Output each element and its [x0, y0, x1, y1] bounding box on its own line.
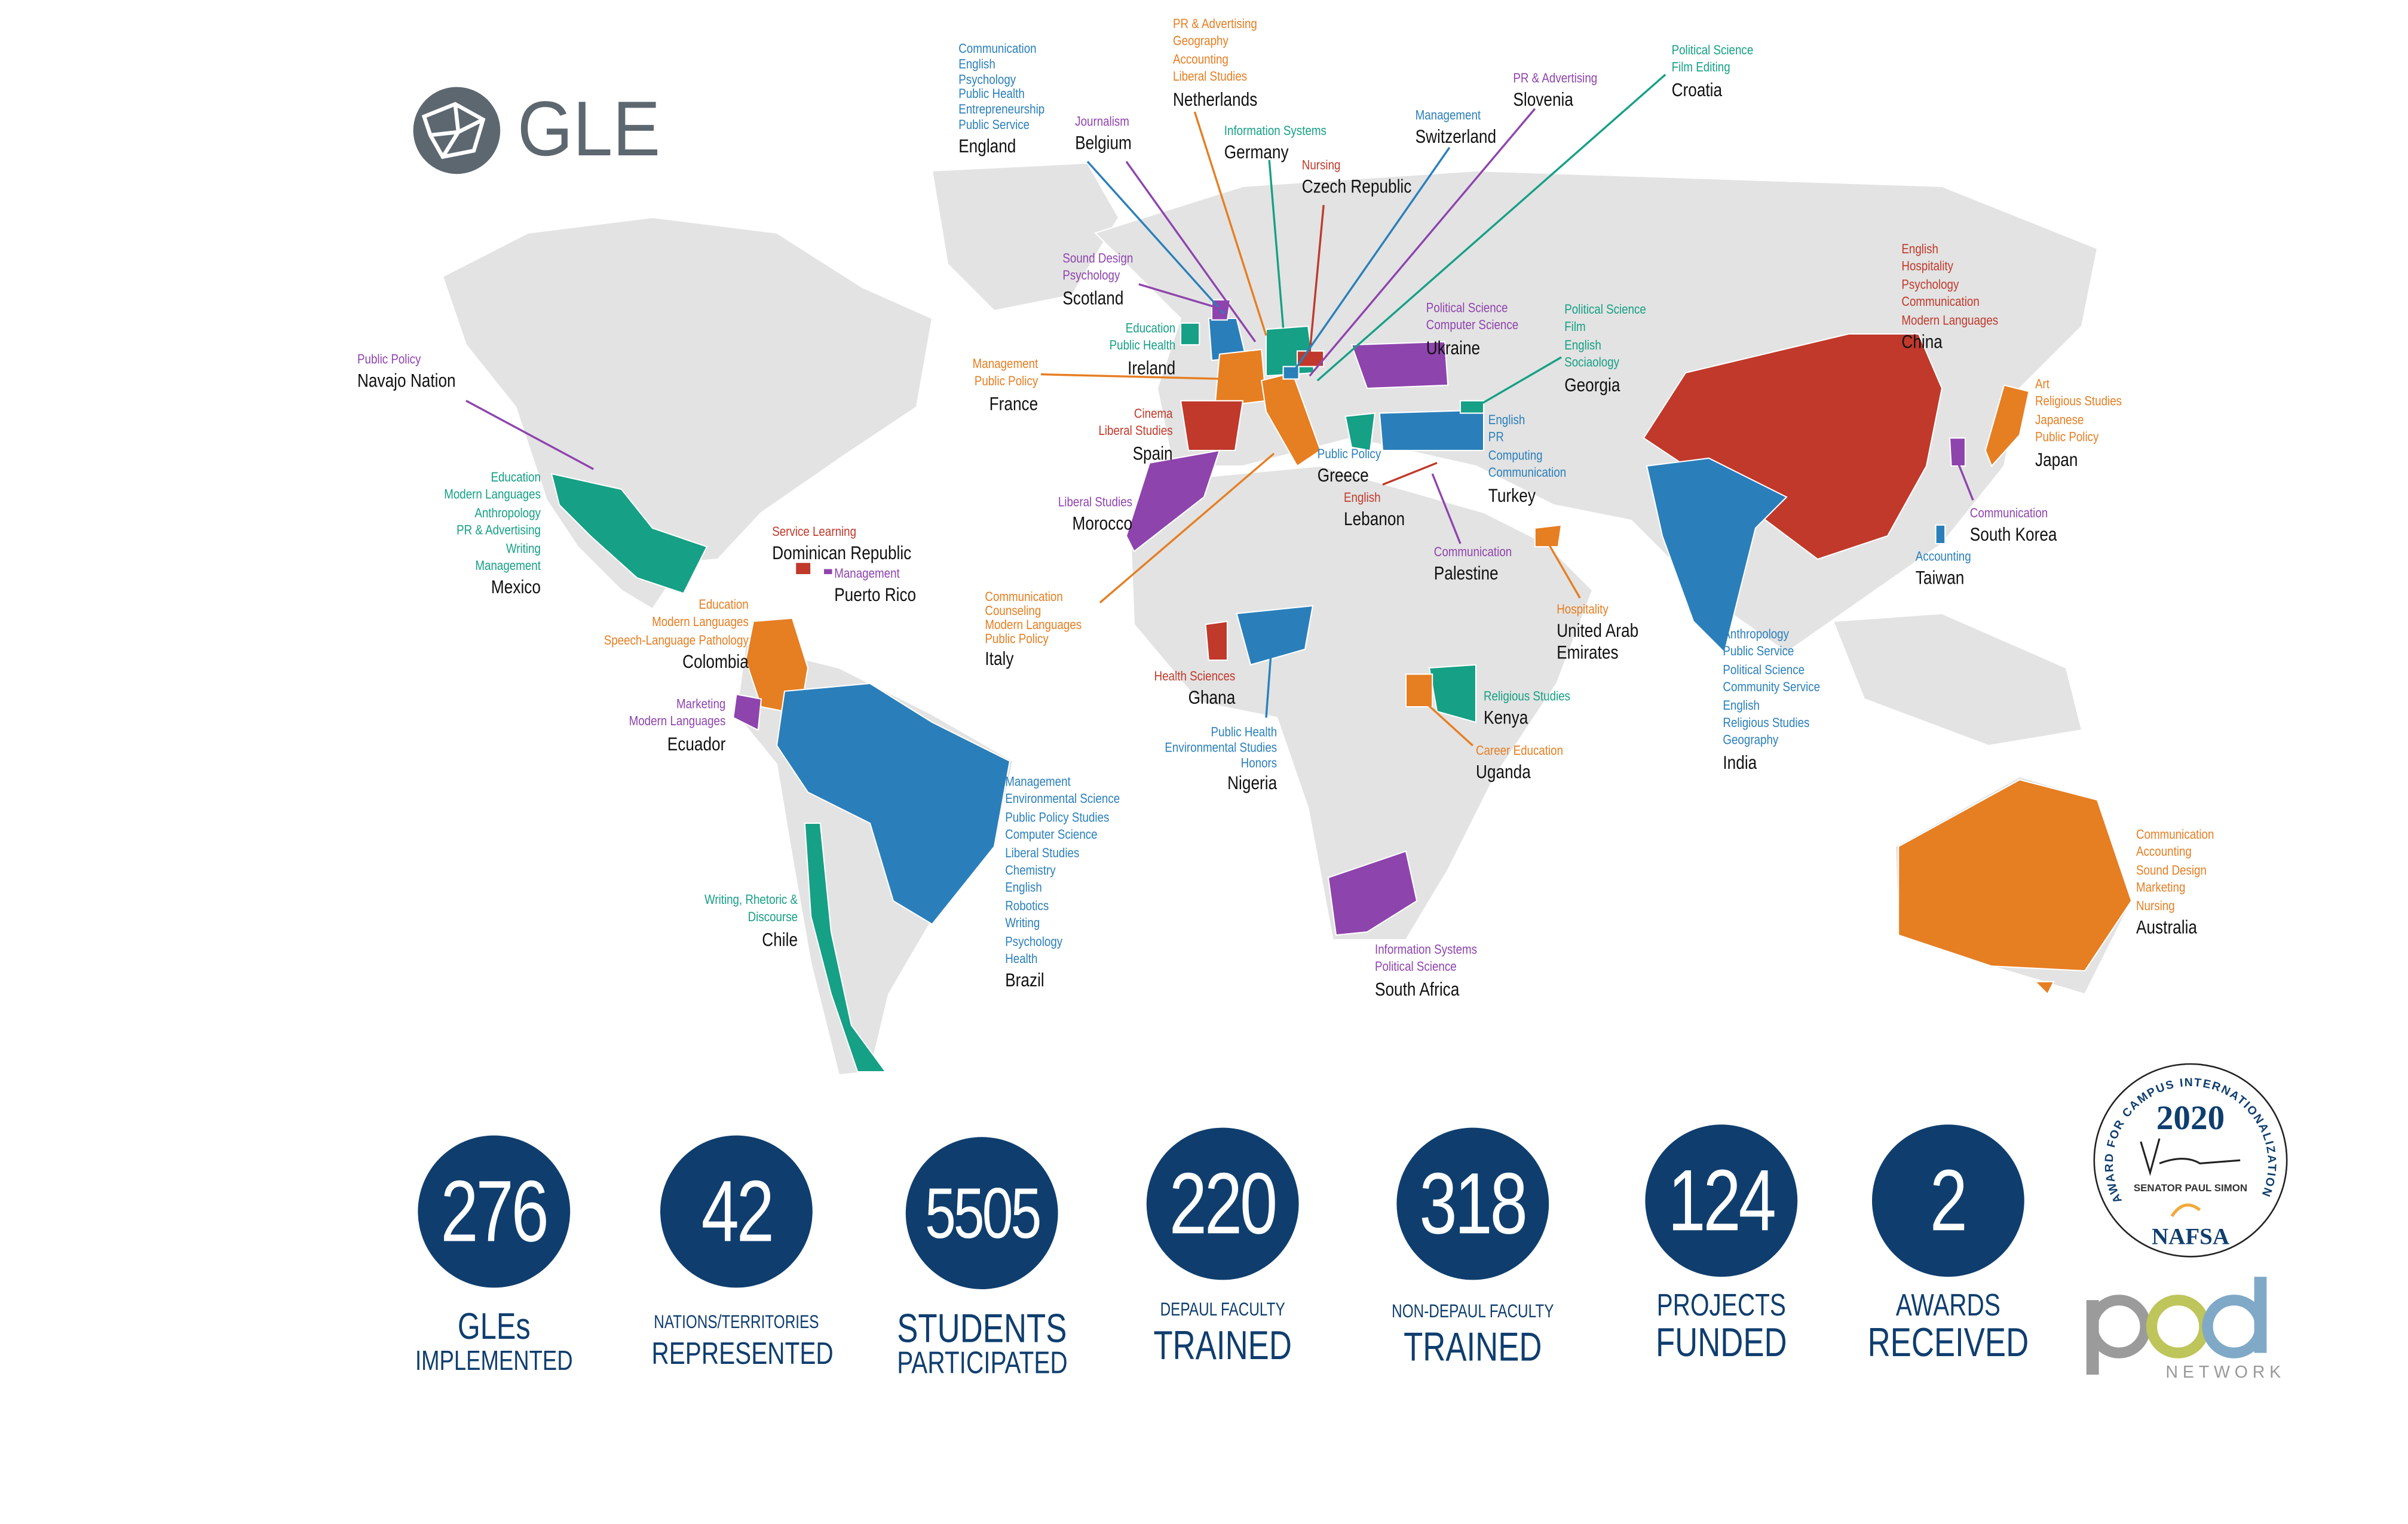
text: Marketing	[676, 696, 725, 712]
text: Information Systems	[1375, 942, 1477, 957]
text: Lebanon	[1344, 508, 1405, 531]
text: Dominican Republic	[772, 542, 911, 565]
stat: depaul faculty: 220	[1170, 1154, 1276, 1252]
text: Australia	[2136, 916, 2197, 938]
labels: Americas: Public Policy	[357, 351, 421, 367]
text: Environmental Science	[1005, 791, 1120, 807]
text: Scotland	[1062, 287, 1123, 309]
stat: nations: REPRESENTED	[651, 1338, 834, 1372]
stat: GLEs: GLEs	[458, 1307, 531, 1348]
text: Modern Languages	[985, 617, 1082, 632]
text: Management	[475, 557, 541, 573]
labels: Europe: Psychology	[958, 71, 1016, 87]
badge: NAFSA award: AWARD FOR CAMPUS INTERNATIONALIZATION	[2104, 1078, 2277, 1201]
stat: non-depaul faculty: TRAINED	[1404, 1323, 1542, 1370]
badge: NAFSA award: 2020	[2156, 1099, 2225, 1137]
text: English	[1723, 697, 1760, 712]
text: Turkey	[1488, 484, 1536, 506]
labels: Asia / Oceania: English	[1901, 241, 1938, 256]
text: Mexico	[491, 577, 541, 599]
stat: GLEs: IMPLEMENTED	[415, 1345, 573, 1376]
stat: nations	[651, 1135, 834, 1372]
text: Art	[2035, 376, 2049, 391]
text: Ireland	[1128, 357, 1176, 379]
text: Liberal Studies	[1005, 844, 1079, 860]
text: Nigeria	[1227, 772, 1277, 795]
text: Political Science	[1426, 300, 1508, 315]
text: Taiwan	[1916, 568, 1964, 589]
text: Colombia	[682, 651, 749, 673]
text: Career Education	[1476, 743, 1563, 758]
text: Liberal Studies	[1099, 423, 1173, 439]
stat: awards: RECEIVED	[1868, 1318, 2029, 1365]
text: Journalism	[1075, 114, 1129, 129]
text: Japanese	[2035, 412, 2084, 427]
text: Education	[1126, 320, 1176, 336]
text: Anthropology	[1723, 626, 1789, 642]
text: Public Policy Studies	[1005, 809, 1109, 824]
text: Ukraine	[1426, 337, 1480, 358]
labels: Asia / Oceania	[1901, 241, 1998, 352]
text: Liberal Studies	[1173, 69, 1247, 84]
text: Italy	[985, 648, 1013, 670]
text: Communication	[1970, 505, 2048, 520]
text: Emirates	[1557, 642, 1619, 664]
text: Psychology	[1062, 268, 1120, 283]
text: Honors	[1241, 755, 1277, 770]
text: Writing	[1005, 915, 1040, 931]
text: Belgium	[1075, 133, 1132, 154]
stat: students: PARTICIPATED	[897, 1347, 1068, 1381]
stat: GLEs	[415, 1135, 573, 1376]
text: Brazil	[1005, 970, 1044, 992]
text: Robotics	[1005, 897, 1049, 913]
text: India	[1723, 752, 1757, 773]
text: PR & Advertising	[1173, 16, 1257, 31]
text: Discourse	[747, 909, 797, 925]
text: Public Policy	[2035, 429, 2098, 444]
text: Accounting	[2136, 844, 2192, 860]
text: Chemistry	[1005, 862, 1056, 878]
text: Public Policy	[974, 373, 1038, 389]
text: Nursing	[1302, 157, 1341, 173]
text: Sound Design	[1062, 250, 1133, 266]
text: Netherlands	[1173, 88, 1257, 110]
logo: GLE: GLE	[517, 85, 660, 173]
text: Religious Studies	[2035, 394, 2122, 409]
text: Service Learning	[772, 523, 856, 539]
stat: non-depaul faculty: NON-DEPAUL FACULTY	[1392, 1300, 1554, 1322]
labels: Europe: Communication	[958, 41, 1037, 56]
text: Nursing	[2136, 897, 2175, 913]
text: Geography	[1173, 33, 1228, 49]
text: Czech Republic	[1302, 176, 1411, 198]
text: Public Health	[1211, 724, 1277, 740]
labels: Europe: England	[958, 135, 1016, 157]
labels: Europe: Public Health	[958, 86, 1025, 102]
logo: pod network	[2087, 1277, 2286, 1382]
text: Health	[1005, 950, 1037, 966]
text: Religious Studies	[1484, 688, 1570, 704]
stat: depaul faculty: TRAINED	[1153, 1322, 1292, 1369]
text: Management	[834, 565, 900, 581]
stat: depaul faculty: DEPAUL FACULTY	[1160, 1299, 1285, 1320]
text: Public Health	[1110, 338, 1176, 353]
stat: non-depaul faculty	[1392, 1128, 1554, 1370]
text: Speech-Language Pathology	[604, 632, 749, 648]
stat: students: STUDENTS	[897, 1305, 1067, 1351]
labels: Asia / Oceania: Communication	[1901, 294, 1980, 309]
text: Information Systems	[1224, 122, 1326, 138]
text: English	[1488, 412, 1525, 427]
text: Political Science	[1723, 661, 1805, 677]
text: Geography	[1723, 732, 1778, 748]
text: Management	[1416, 107, 1481, 122]
text: Communication	[1488, 465, 1566, 480]
text: Spain	[1133, 443, 1173, 464]
text: Cinema	[1134, 406, 1173, 421]
text: United Arab	[1557, 620, 1638, 642]
badge: NAFSA award: SENATOR PAUL SIMON	[2134, 1182, 2247, 1194]
labels: Asia / Oceania: China	[1901, 331, 1943, 352]
text: Psychology	[1005, 933, 1062, 949]
text: Modern Languages	[629, 713, 725, 729]
labels: Americas	[357, 351, 456, 392]
labels: Africa: Ghana	[1188, 687, 1235, 709]
text: Management	[972, 355, 1038, 371]
stat: awards: AWARDS	[1896, 1289, 2000, 1323]
stat: awards	[1868, 1124, 2029, 1365]
text: Sound Design	[2136, 862, 2207, 878]
text: South Africa	[1375, 979, 1459, 1000]
stat: projects: PROJECTS	[1657, 1289, 1786, 1323]
badge: NAFSA award: NAFSA	[2152, 1224, 2229, 1250]
labels: Asia / Oceania: Psychology	[1901, 276, 1959, 292]
text: Hospitality	[1557, 601, 1609, 617]
text: Film	[1564, 319, 1586, 335]
stat: nations: NATIONS/TERRITORIES	[654, 1311, 819, 1333]
labels: Americas: Navajo Nation	[357, 370, 456, 392]
text: Writing, Rhetoric &	[704, 891, 797, 907]
stat: GLEs: 276	[441, 1162, 547, 1260]
text: PR & Advertising	[457, 522, 541, 538]
text: Education	[491, 469, 541, 485]
text: Chile	[761, 928, 797, 950]
text: South Korea	[1970, 524, 2057, 546]
text: Morocco	[1073, 513, 1132, 535]
logo: pod network: NETWORK	[2165, 1363, 2286, 1382]
stat: non-depaul faculty: 318	[1420, 1154, 1525, 1252]
text: Germany	[1224, 142, 1289, 164]
stat: projects	[1645, 1124, 1797, 1365]
leader lines	[466, 75, 1973, 746]
text: Management	[1005, 774, 1071, 789]
badge: NAFSA award	[2094, 1063, 2287, 1258]
text: Public Policy	[1318, 446, 1381, 461]
text: Public Policy	[985, 631, 1049, 646]
text: Accounting	[1173, 51, 1228, 66]
text: Political Science	[1672, 42, 1753, 57]
text: Political Science	[1375, 959, 1457, 974]
labels: Europe: Public Service	[958, 116, 1030, 132]
text: Film Editing	[1672, 60, 1730, 75]
text: Public Service	[1723, 643, 1794, 659]
text: France	[989, 393, 1038, 415]
text: Anthropology	[474, 505, 541, 520]
text: Modern Languages	[652, 614, 749, 630]
text: PR & Advertising	[1513, 70, 1597, 85]
labels: Asia / Oceania: Hospitality	[1901, 259, 1953, 274]
text: Greece	[1318, 465, 1369, 487]
text: Uganda	[1476, 762, 1531, 783]
stat: projects: FUNDED	[1656, 1318, 1787, 1365]
text: English	[1005, 880, 1042, 896]
text: Counseling	[985, 603, 1041, 618]
labels: Africa: Health Sciences	[1154, 668, 1235, 683]
text: Georgia	[1564, 374, 1620, 395]
text: Communication	[985, 588, 1063, 604]
text: Computing	[1488, 447, 1543, 462]
text: Environmental Studies	[1165, 739, 1277, 755]
stat: awards: 2	[1931, 1151, 1966, 1249]
text: Puerto Rico	[834, 585, 916, 606]
stat: nations: 42	[701, 1162, 771, 1260]
text: Community Service	[1723, 679, 1820, 695]
text: Croatia	[1672, 79, 1722, 101]
text: Modern Languages	[444, 487, 541, 502]
text: Liberal Studies	[1058, 494, 1132, 510]
text: Communication	[1434, 544, 1512, 559]
text: Political Science	[1564, 301, 1646, 317]
text: Marketing	[2136, 879, 2185, 895]
text: English	[1344, 489, 1381, 505]
text: PR	[1488, 430, 1504, 445]
stat: depaul faculty	[1146, 1128, 1299, 1369]
text: Communication	[2136, 826, 2214, 842]
logo: GLE	[413, 85, 660, 174]
text: English	[1564, 337, 1601, 352]
text: Sociaology	[1564, 354, 1619, 370]
stat: projects: 124	[1668, 1151, 1774, 1249]
text: Computer Science	[1005, 827, 1098, 842]
text: Writing	[506, 540, 541, 556]
labels: Europe: Entrepreneurship	[958, 101, 1044, 116]
stat: students: 5505	[925, 1173, 1039, 1253]
text: Slovenia	[1513, 89, 1573, 111]
text: Palestine	[1434, 563, 1499, 585]
labels: Asia / Oceania: Modern Languages	[1901, 312, 1998, 327]
text: Japan	[2035, 448, 2078, 470]
text: Accounting	[1916, 548, 1971, 564]
text: Kenya	[1484, 707, 1528, 729]
text: Computer Science	[1426, 317, 1518, 333]
text: Switzerland	[1416, 127, 1496, 148]
text: Ecuador	[667, 733, 725, 755]
stat: students	[897, 1137, 1068, 1381]
text: Religious Studies	[1723, 715, 1809, 730]
text: Education	[699, 596, 749, 612]
labels: Europe: English	[958, 56, 995, 71]
labels: Europe	[958, 41, 1044, 157]
labels: Africa	[1154, 668, 1236, 709]
